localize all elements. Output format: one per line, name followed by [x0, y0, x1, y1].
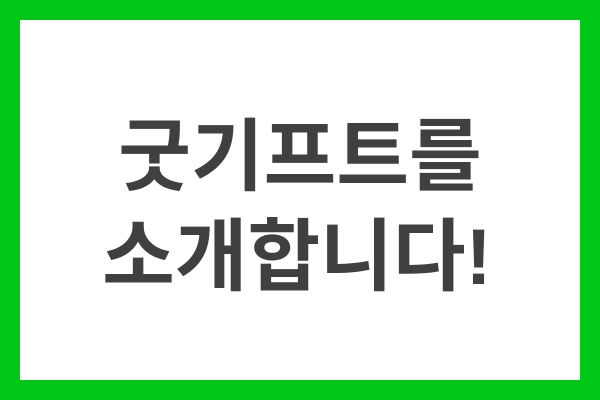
title: 소개합니다! [102, 212, 492, 301]
title [102, 112, 492, 301]
title: 굿기프트를 [118, 112, 482, 201]
